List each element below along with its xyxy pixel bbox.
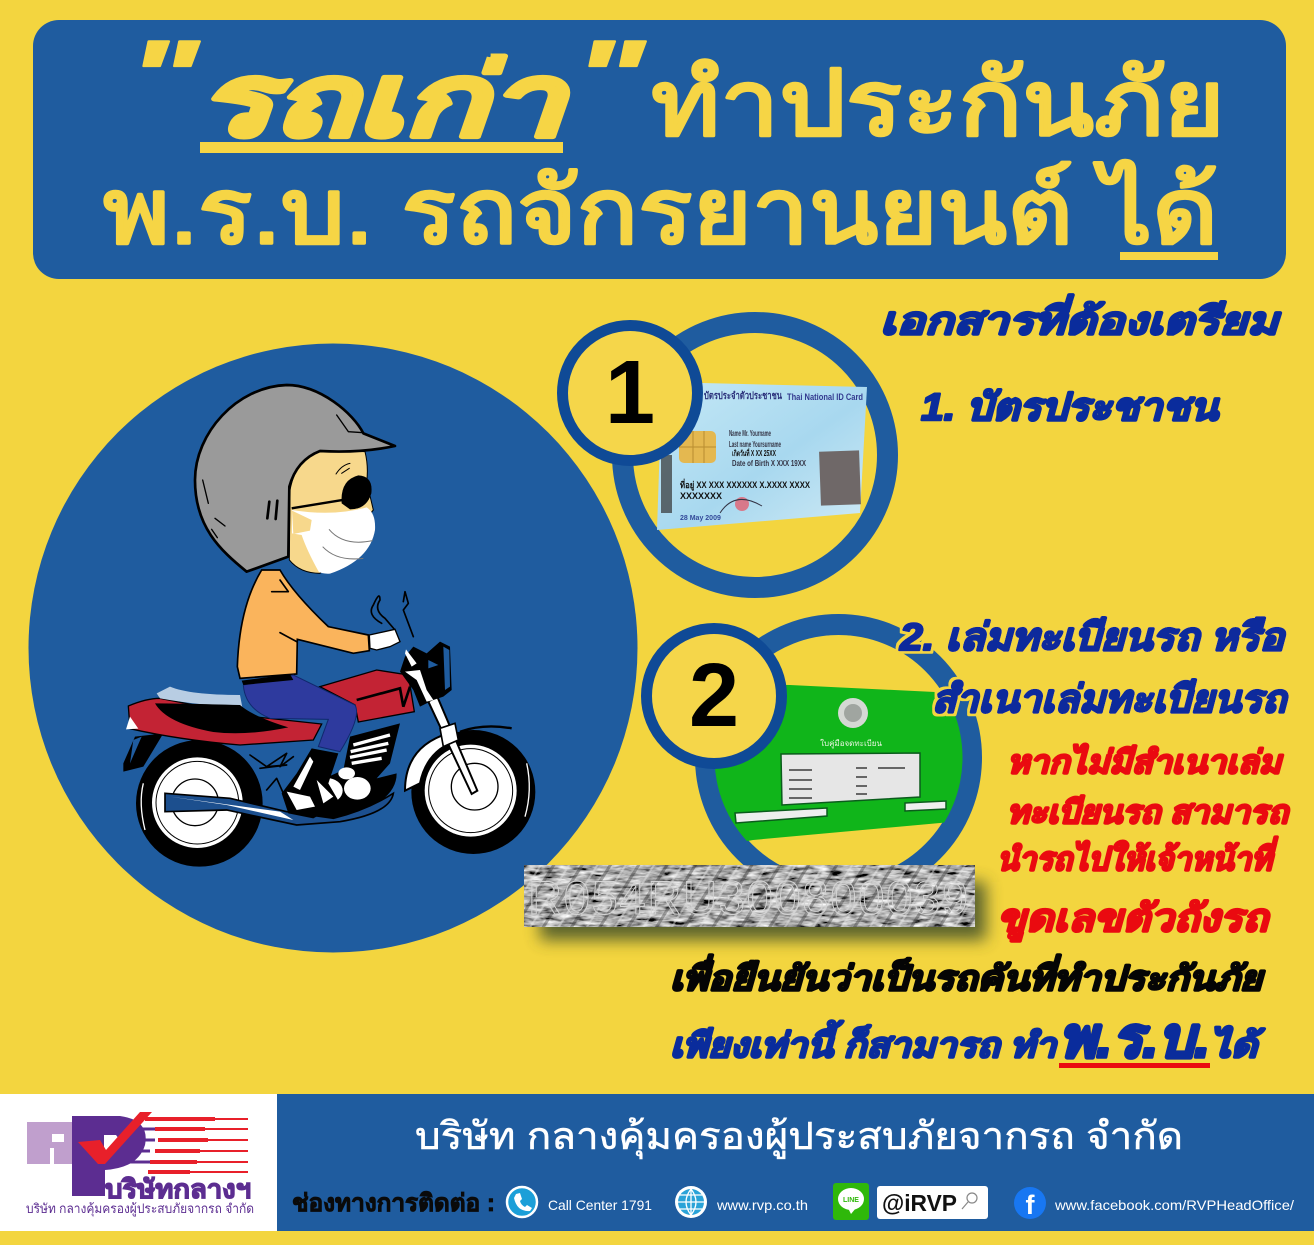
red underline (1059, 1063, 1210, 1068)
badge 1: 1 (605, 343, 655, 443)
text: documents heading: เอกสารที่ต้องเตรียม (880, 294, 1282, 343)
text: closing line: เพียงเท่านี้ ก็สามารถ ทำ (670, 1020, 1058, 1065)
title banner (33, 20, 1286, 279)
contact label: ช่องทางการติดต่อ : (292, 1190, 495, 1217)
text: closing line: ได้ (1210, 1025, 1265, 1065)
badge 2 (646, 628, 782, 764)
LINE id box: @iRVP (882, 1190, 957, 1216)
text: closing line (670, 1006, 1265, 1069)
sunglasses (292, 463, 372, 509)
ID card image: บัตรประจำตัวประชาชน (704, 390, 782, 402)
mirrors (371, 592, 413, 637)
text: confirmation line: เพื่อยืนยันว่าเป็นรถคันที่ทำประกันภัย (670, 954, 1265, 998)
title old vehicle: รถเก่า (198, 45, 569, 157)
engine (293, 723, 400, 820)
ring 1 (622, 322, 888, 588)
ID card image: 28 May 2009 (680, 515, 721, 522)
text: red note line 2: ทะเบียนรถ สามารถ (1007, 794, 1291, 830)
handlebar (400, 642, 452, 707)
icon: phone (507, 1187, 537, 1217)
title quote close: " (574, 20, 646, 132)
icon: facebook: f (1026, 1190, 1036, 1220)
title line 2: พ.ร.บ. รถจักรยานยนต์ ได้ (103, 161, 1218, 263)
front fender (405, 733, 458, 791)
chassis number plate: R054RU300800039 (528, 871, 968, 924)
big blue circle (28, 344, 638, 952)
title underline (200, 142, 563, 153)
title quote open: " (128, 20, 200, 132)
icon: LINE: LINE (843, 1197, 859, 1204)
text: item 1: 1. บัตรประชาชน (921, 387, 1220, 429)
badge 1 (562, 326, 698, 460)
badge 2: 2 (689, 646, 739, 746)
icon: globe (675, 1186, 707, 1218)
exhaust (165, 793, 393, 825)
logo RVP: บริษัทกลางฯ (105, 1174, 251, 1204)
text: item 2 line 2: สำเนาเล่มทะเบียนรถ (932, 679, 1289, 721)
panel: document 1 (562, 322, 888, 588)
footer contact bar (277, 1094, 1314, 1231)
ID card image: Last name Yoursurname (729, 440, 781, 449)
text: red note line 4: ขูดเลขตัวถังรถ (997, 898, 1271, 942)
torso and arm (237, 570, 369, 678)
LINE id box (877, 1186, 988, 1219)
boot (282, 748, 340, 818)
green registration book (715, 684, 962, 842)
ring 2 (706, 624, 972, 890)
front wheel (411, 730, 535, 854)
fuel tank (320, 670, 414, 722)
chassis number plate (524, 865, 986, 940)
text: red note line 1: หากไม่มีสำเนาเล่ม (1007, 743, 1284, 780)
seat top (157, 687, 242, 707)
underline can (1120, 252, 1218, 260)
ID card image (657, 382, 867, 530)
text: red note line 3: นำรถไปให้เจ้าหน้าที่ (997, 836, 1278, 877)
icon: LINE (833, 1183, 869, 1220)
title line 1: ทำประกันภัย (651, 53, 1225, 155)
ID card image: Thai National ID Card (787, 392, 863, 403)
face (289, 451, 373, 573)
ID card image: ที่อยู่ XX XXX XXXXXX X.XXXX XXXX (680, 478, 810, 491)
seat (155, 703, 288, 733)
facebook address: www.facebook.com/RVPHeadOffice/ (1054, 1197, 1294, 1213)
ID card image: Name Mr. Yourname (729, 429, 771, 438)
rear suspension and frame (123, 733, 163, 772)
call center: Call Center 1791 (548, 1197, 652, 1213)
illustration: masked rider on motorcycle (123, 385, 535, 867)
panel: document 2 (646, 624, 972, 890)
rear body (128, 698, 322, 745)
green registration book: ใบคู่มือจดทะเบียน (820, 739, 882, 749)
text: closing line: พ.ร.บ. (1059, 1006, 1210, 1069)
icon: facebook (1014, 1187, 1046, 1220)
company name: บริษัท กลางคุ้มครองผู้ประสบภัยจากรถ จำกัด (415, 1116, 1183, 1159)
ID card image: XXXXXXX (680, 491, 722, 501)
website: www.rvp.co.th (716, 1197, 808, 1213)
text: item 2 line 1: 2. เล่มทะเบียนรถ หรือ (899, 617, 1286, 659)
glove (369, 629, 400, 650)
logo RVP: บริษัท กลางคุ้มครองผู้ประสบภัยจากรถ จำกัด (26, 1201, 254, 1217)
helmet (195, 385, 395, 572)
trousers (243, 675, 357, 752)
ID card image: เกิดวันที่ X XX 25XX (732, 447, 776, 458)
ID card image: Date of Birth X XXX 19XX (732, 459, 807, 468)
footer logo panel (0, 1094, 277, 1231)
logo RVP (26, 1112, 254, 1217)
fork (417, 672, 477, 794)
rear wheel (136, 740, 263, 867)
face mask (292, 507, 375, 574)
